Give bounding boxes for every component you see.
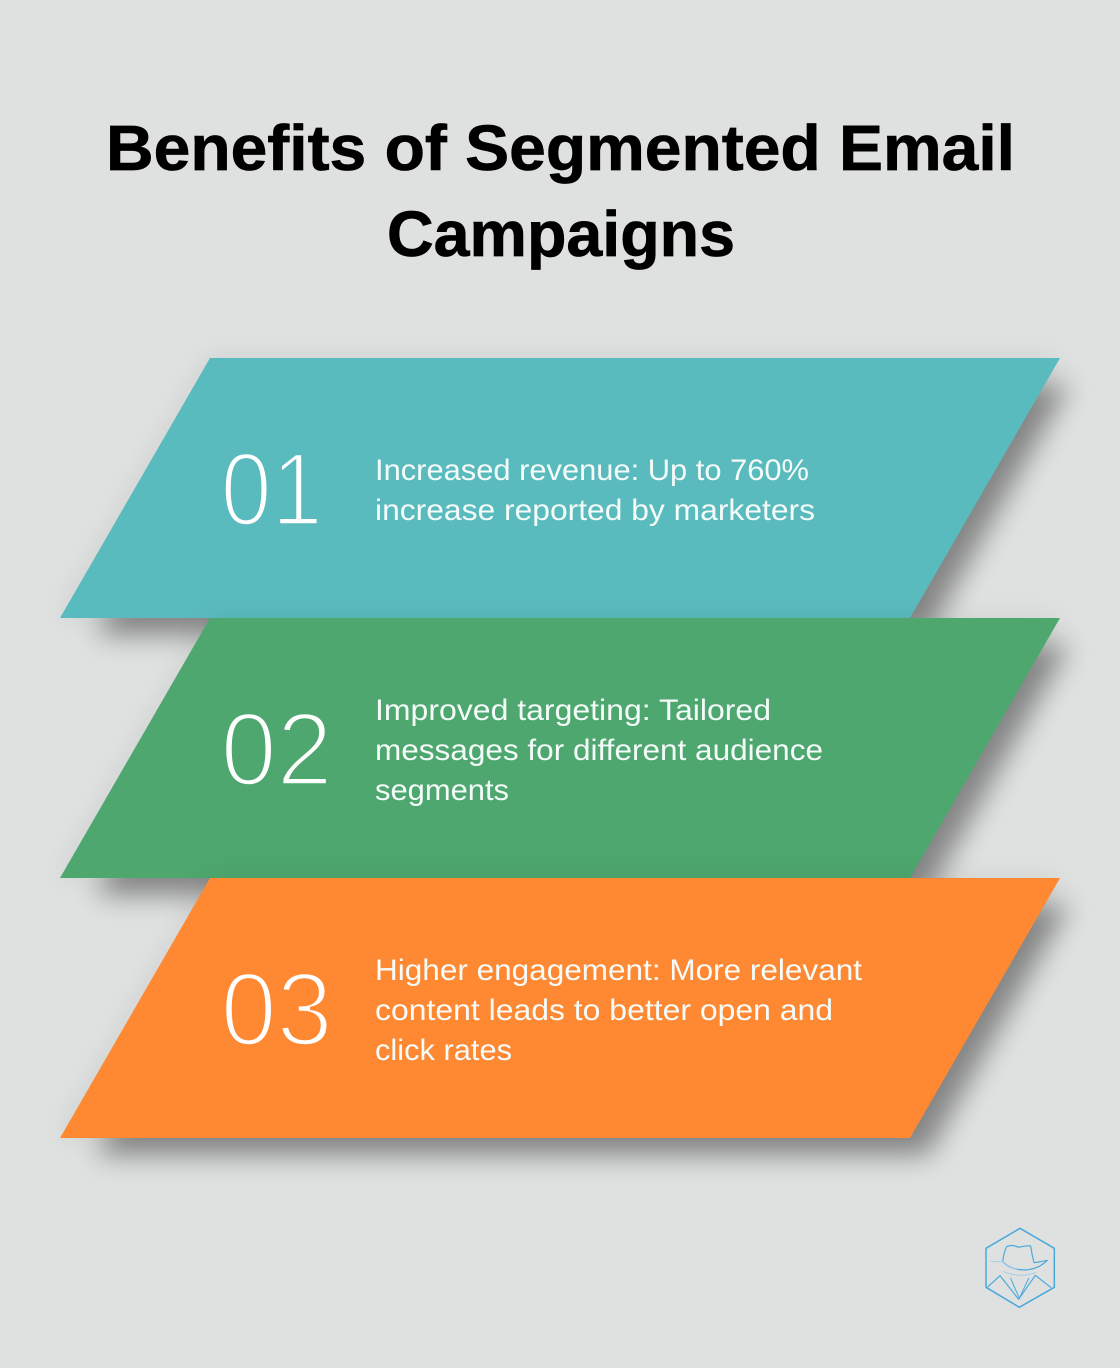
text: increased revenue [375, 454, 815, 527]
panel: step 02 improved targeting [60, 618, 1070, 896]
text: increased revenue: increase reported by marketers [375, 494, 815, 527]
text: improved targeting [375, 694, 823, 807]
text: improved targeting: messages for different audience [375, 734, 823, 767]
text: improved targeting: segments [375, 774, 509, 807]
text: increased revenue: Increased revenue: Up to 760% [375, 454, 809, 487]
text: higher engagement [375, 954, 863, 1067]
number 02: 02 [221, 692, 333, 808]
title: Benefits of Segmented Email [106, 112, 1015, 184]
text: improved targeting: Improved targeting: Tailored [375, 694, 771, 727]
title [106, 112, 1015, 270]
number 01: 01 [221, 432, 323, 548]
text: higher engagement: click rates [375, 1034, 512, 1067]
icon: logo hexagon with hat [986, 1228, 1054, 1307]
title: Campaigns [387, 198, 735, 270]
number 03: 03 [221, 952, 333, 1068]
text: higher engagement: content leads to better open and [375, 994, 833, 1027]
text: higher engagement: Higher engagement: More relevant [375, 954, 863, 987]
panel: step 03 higher engagement [60, 878, 1070, 1156]
panel: step 01 increased revenue [60, 358, 1070, 636]
